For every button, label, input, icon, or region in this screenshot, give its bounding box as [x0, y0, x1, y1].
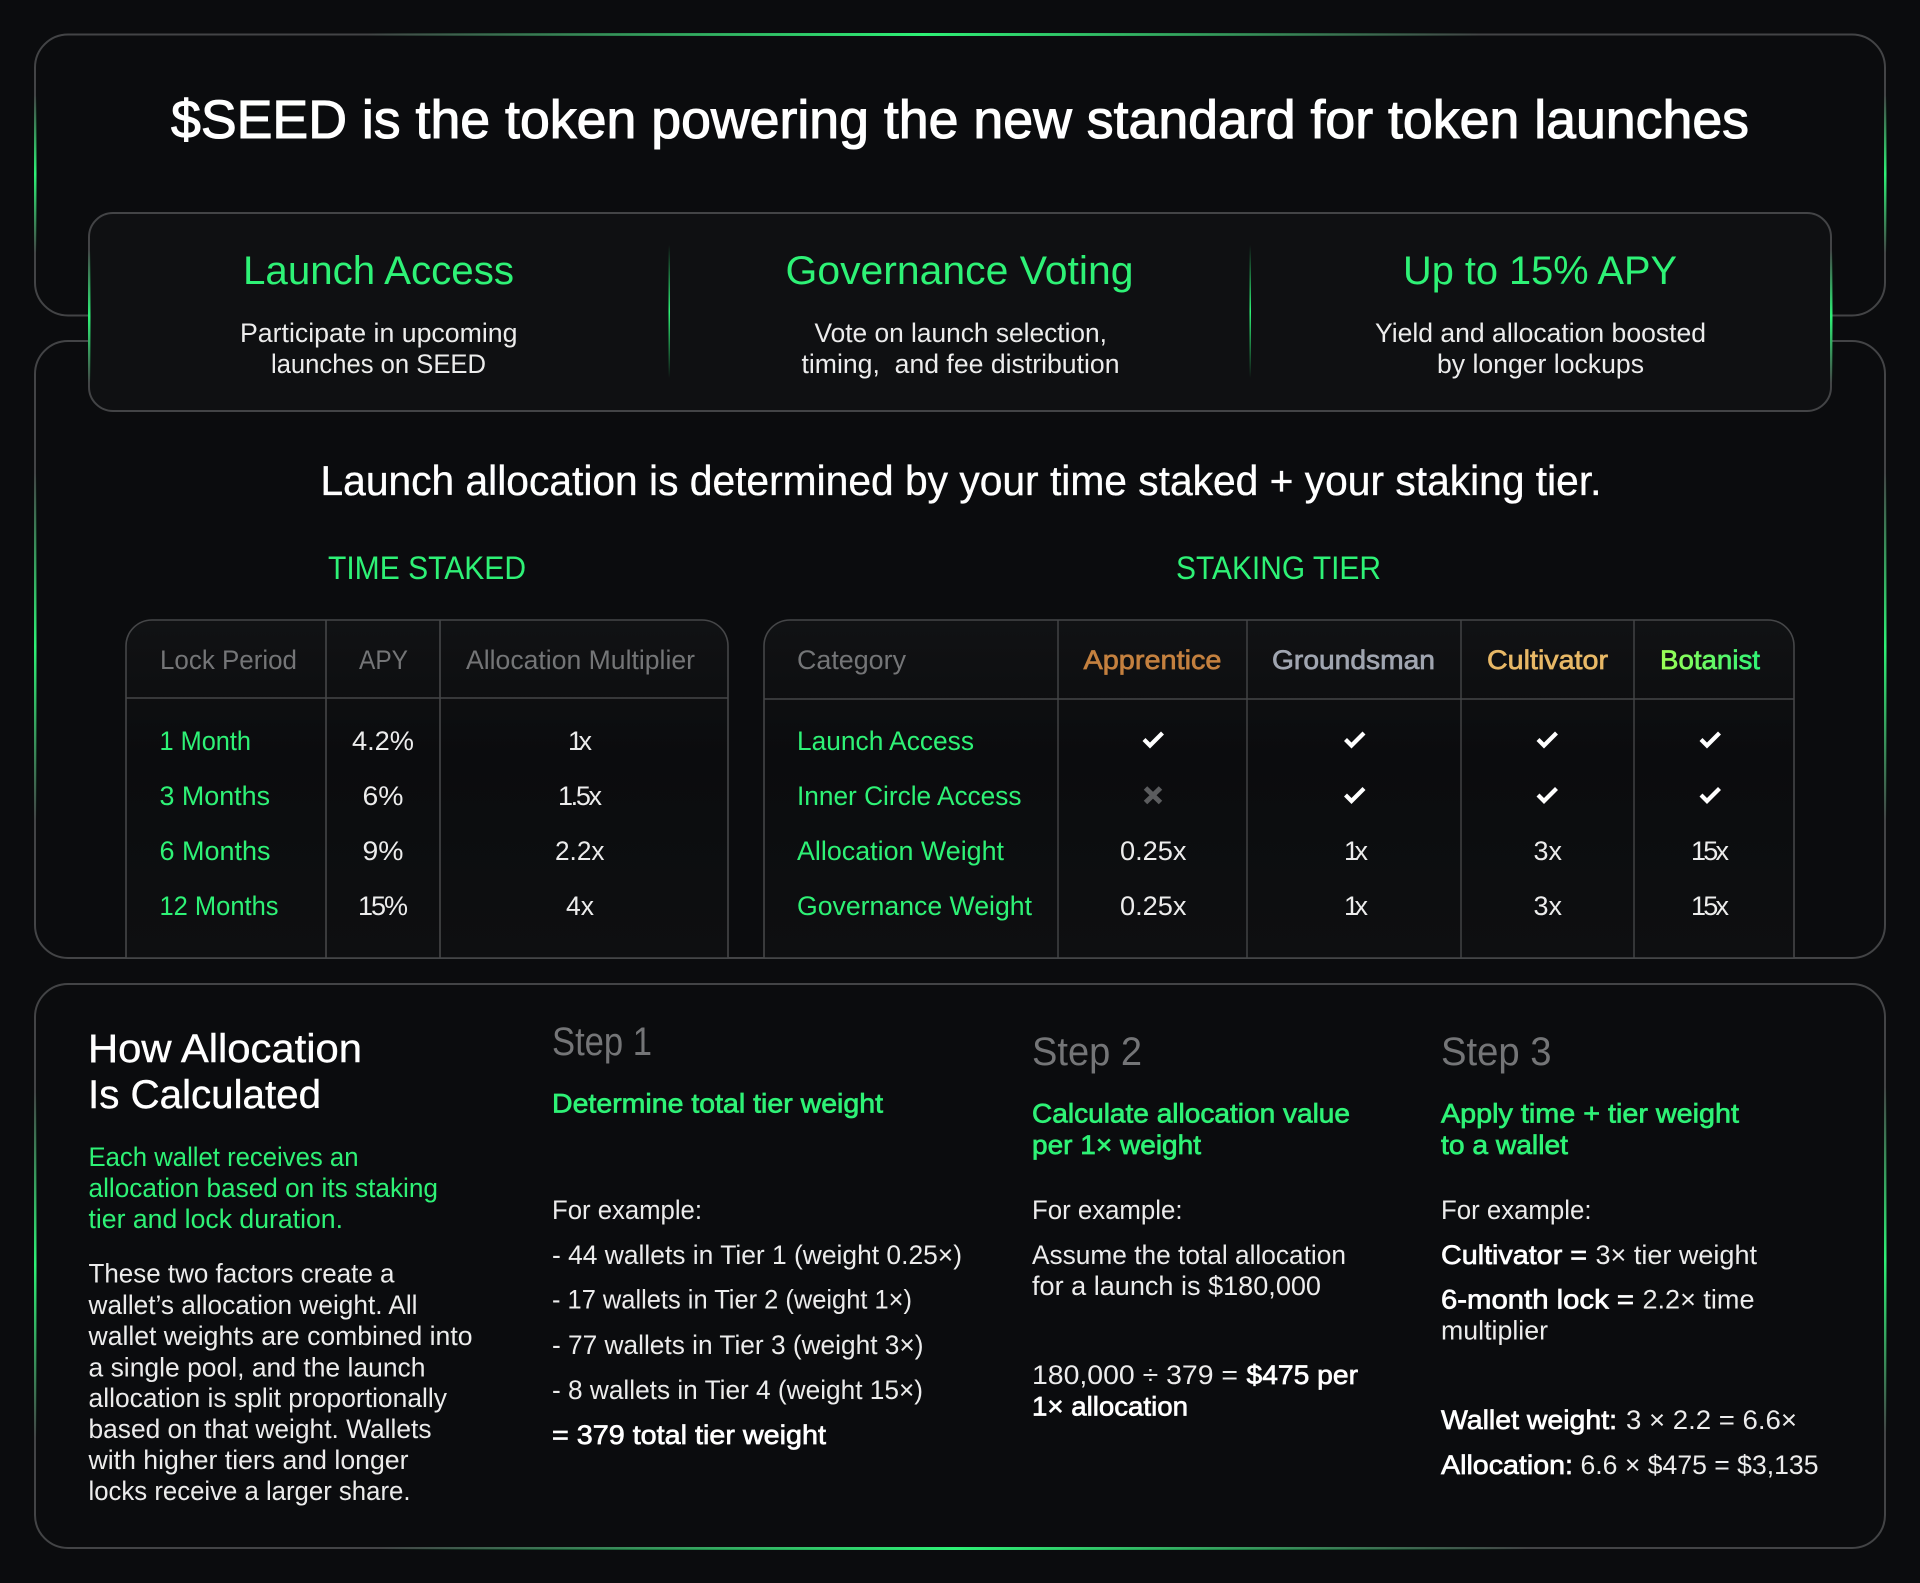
benefit: governance voting: Vote on launch selection, — [814, 318, 1107, 348]
step 1: = 379 total tier weight — [552, 1420, 827, 1450]
table header: Groundsman — [1272, 645, 1435, 675]
row: governance weight: 3x — [1534, 891, 1562, 921]
step 3: Cultivator = — [1441, 1240, 1587, 1270]
text: allocation summary: allocation based on its staking — [88, 1173, 438, 1203]
row: 6 months: 2.2x — [555, 836, 605, 866]
step 3: For example: — [1441, 1195, 1592, 1225]
row: 6 months: 9% — [362, 836, 404, 866]
step 2: per 1× weight — [1032, 1130, 1202, 1160]
row: allocation weight: 0.25x — [1120, 836, 1187, 866]
table header: Category — [797, 645, 906, 675]
step 3: Wallet weight: — [1441, 1405, 1617, 1435]
row: 1 month: 4.2% — [352, 726, 414, 756]
step 1: - 44 wallets in Tier 1 (weight 0.25×) — [552, 1240, 962, 1270]
text: allocation description: wallet’s allocation weight. All — [88, 1290, 418, 1320]
benefit: governance voting: Governance Voting — [786, 249, 1134, 293]
row: 6 months — [160, 836, 605, 866]
row: governance weight: Governance Weight — [797, 891, 1032, 921]
step 3: multiplier — [1441, 1316, 1548, 1346]
row: 1 month: 1x — [568, 726, 592, 756]
text: allocation description: wallet weights are combined into — [88, 1321, 473, 1351]
row: 3 months: 3 Months — [160, 781, 270, 811]
row: 1 month — [160, 726, 592, 756]
text: allocation description: a single pool, and the launch — [88, 1352, 426, 1382]
table header: Cultivator — [1487, 645, 1608, 675]
step 1: - 17 wallets in Tier 2 (weight 1×) — [552, 1284, 912, 1314]
row: governance weight: 1x — [1344, 891, 1368, 921]
step 2: Step 2 — [1032, 1030, 1142, 1074]
step 2: 180,000 ÷ 379 = — [1032, 1360, 1238, 1390]
text: allocation description: locks receive a larger share. — [88, 1476, 410, 1506]
benefit: apy: Yield and allocation boosted — [1375, 318, 1706, 348]
step 2: Calculate allocation value — [1032, 1098, 1350, 1128]
step 1 — [552, 1020, 962, 1450]
step 2: $475 per — [1246, 1360, 1358, 1390]
heading: how allocation is calculated: Is Calculated — [88, 1073, 321, 1117]
row: launch access — [797, 726, 1720, 756]
row: launch access: Launch Access — [797, 726, 974, 756]
row: 6 months: 6 Months — [160, 836, 270, 866]
step 3: 2.2× time — [1642, 1284, 1754, 1314]
row: 12 months: 12 Months — [160, 891, 278, 921]
step 3: to a wallet — [1441, 1130, 1569, 1160]
benefit: governance voting — [786, 249, 1134, 379]
row: 1 month: 1 Month — [160, 726, 251, 756]
row: inner circle access — [797, 781, 1720, 811]
benefit: governance voting: timing, and fee distribution — [802, 349, 1120, 379]
label: staking tier: STAKING TIER — [1176, 550, 1381, 586]
step 3: 3× tier weight — [1596, 1240, 1757, 1270]
table header: Botanist — [1660, 645, 1761, 675]
step 3 — [1441, 1030, 1818, 1480]
text: allocation summary: Each wallet receives an — [88, 1142, 358, 1172]
step 3: 6-month lock = — [1441, 1284, 1634, 1314]
step 1: Step 1 — [552, 1020, 652, 1064]
step 2 — [1032, 1030, 1358, 1422]
step 2: Assume the total allocation — [1032, 1240, 1346, 1270]
text: allocation summary: tier and lock duration. — [88, 1204, 343, 1234]
row: 3 months: 1.5x — [558, 781, 602, 811]
step 2: For example: — [1032, 1195, 1182, 1225]
step 1: Determine total tier weight — [552, 1088, 884, 1118]
row: governance weight: 0.25x — [1120, 891, 1187, 921]
panel: allocation tables — [34, 341, 1886, 958]
table header — [160, 645, 695, 675]
step 3: Apply time + tier weight — [1441, 1098, 1740, 1128]
row: allocation weight: 3x — [1534, 836, 1562, 866]
benefit: launch access: Participate in upcoming — [240, 318, 518, 348]
step 3: Step 3 — [1441, 1030, 1552, 1074]
benefit: apy — [1375, 249, 1706, 379]
row: inner circle access: Inner Circle Access — [797, 781, 1022, 811]
benefit: launch access: launches on SEED — [271, 349, 486, 379]
heading: how allocation is calculated — [88, 1027, 362, 1117]
row: 12 months: 15% — [358, 891, 408, 921]
panel: token overview — [34, 33, 1886, 316]
step 2: for a launch is $180,000 — [1032, 1271, 1321, 1301]
benefit: apy: Up to 15% APY — [1403, 249, 1677, 293]
text: allocation description: based on that weight. Wallets — [88, 1414, 432, 1444]
table header — [797, 645, 1761, 675]
row: allocation weight: 1x — [1344, 836, 1368, 866]
text: allocation description: with higher tiers and longer — [88, 1445, 409, 1475]
row: governance weight: 15x — [1691, 891, 1730, 921]
row: 3 months: 6% — [362, 781, 404, 811]
heading: how allocation is calculated: How Allocation — [88, 1027, 362, 1071]
section heading: Launch allocation is determined by your time staked + your staking tier. — [320, 457, 1602, 504]
row: governance weight — [797, 891, 1730, 921]
step 1: - 8 wallets in Tier 4 (weight 15×) — [552, 1375, 923, 1405]
benefit: launch access: Launch Access — [243, 249, 514, 293]
text: allocation description — [88, 1258, 473, 1506]
title: $SEED is the token powering the new standard for token launches — [171, 90, 1749, 150]
row: allocation weight — [797, 836, 1730, 866]
benefit: launch access — [240, 249, 518, 379]
row: allocation weight: Allocation Weight — [797, 836, 1004, 866]
label: time staked: TIME STAKED — [328, 550, 526, 586]
table header: Lock Period — [160, 645, 297, 675]
text: allocation summary — [88, 1142, 438, 1234]
step 3: 6.6 × $475 = $3,135 — [1580, 1450, 1818, 1480]
text: allocation description: These two factors create a — [88, 1258, 395, 1288]
row: allocation weight: 15x — [1691, 836, 1730, 866]
table header: APY — [359, 645, 408, 675]
text: allocation description: allocation is split proportionally — [88, 1383, 447, 1413]
step 3: 3 × 2.2 = 6.6× — [1626, 1405, 1797, 1435]
step 1: - 77 wallets in Tier 3 (weight 3×) — [552, 1330, 924, 1360]
table header: Apprentice — [1084, 645, 1222, 675]
step 3: Allocation: — [1441, 1450, 1573, 1480]
step 1: For example: — [552, 1195, 702, 1225]
row: 3 months — [160, 781, 602, 811]
row: 12 months: 4x — [566, 891, 594, 921]
row: 12 months — [160, 891, 594, 921]
table: staking tier — [764, 620, 1794, 958]
table header: Allocation Multiplier — [466, 645, 695, 675]
table: time staked — [126, 620, 728, 958]
panel: how allocation is calculated — [34, 984, 1886, 1550]
panel: benefits card — [88, 213, 1832, 411]
step 2: 1× allocation — [1032, 1392, 1188, 1422]
benefit: apy: by longer lockups — [1437, 349, 1644, 379]
